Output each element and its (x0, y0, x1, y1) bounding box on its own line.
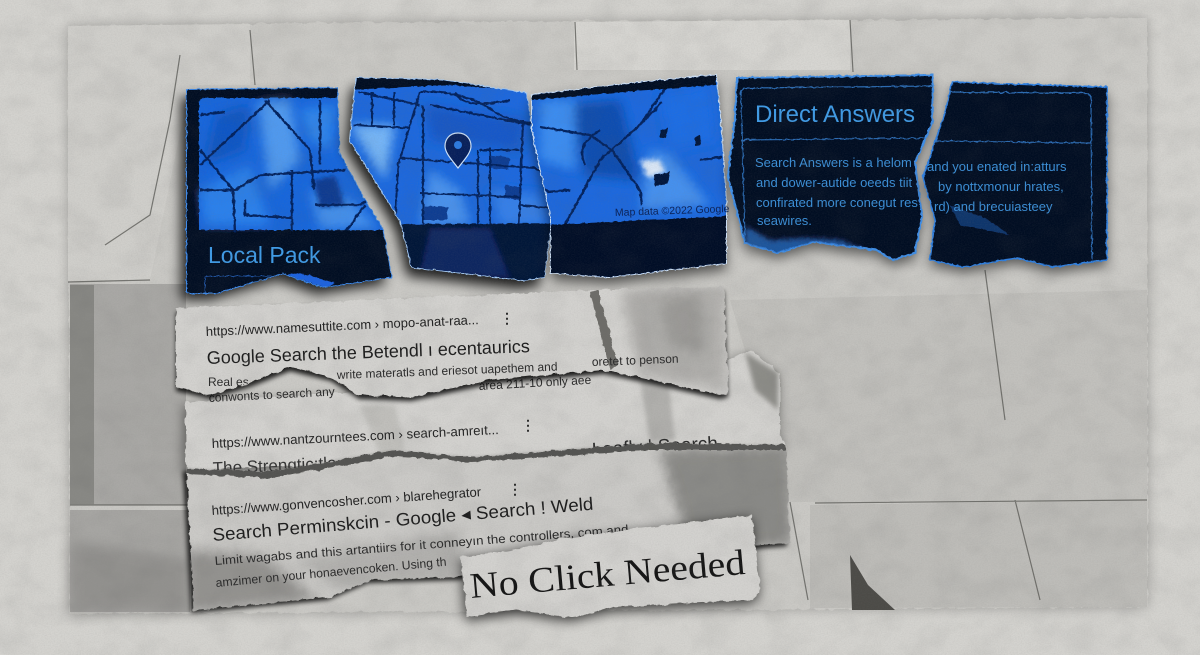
icon: map pin (445, 133, 471, 168)
result title: Search Perminskcin - Google ◂ Search ! Weld (212, 494, 594, 545)
map attribution: Map data ©2022 Google (615, 203, 730, 219)
more menu icon: ⋮ (500, 310, 514, 326)
panel: local pack map piece (180, 85, 400, 300)
search result strip 3 (183, 443, 792, 613)
result description: Real es (208, 375, 249, 389)
result title fragment left: The Strengtic:tle (212, 454, 337, 478)
result url: https://www.namesuttite.com › mopo-anat-raa... (205, 312, 479, 339)
result title fragment: I eafly | Search (591, 433, 718, 461)
result description: Limit wagabs and this artantiirs for it conneyın the controllers, com and (214, 522, 629, 568)
more menu icon: ⋮ (521, 417, 535, 433)
answer body text continued: and you enated in:atturs (927, 159, 1067, 174)
result description: amzimer on your honaevencoken. Using th (215, 555, 447, 590)
panel: central map piece (345, 75, 560, 289)
headline text: No Click Needed (468, 542, 747, 606)
result description (209, 356, 678, 386)
description lines under first tear (208, 373, 592, 405)
label: Local Pack: Local Pack (208, 242, 321, 268)
label strip: No Click Needed (460, 515, 760, 621)
result description: write materatls and eriesot uapethem and (336, 360, 558, 382)
answer body text continued: rd) and brecuiasteey (934, 199, 1053, 214)
description lines under first tear: conwonts to search any (208, 384, 335, 405)
result url: https://www.gonvencosher.com › blarehegrator (211, 484, 482, 518)
search result strip 1 (176, 285, 728, 401)
description lines under first tear: area 211-10 only aee (478, 373, 592, 393)
search result strip 2 (184, 350, 786, 478)
answer body text: seawires. (757, 213, 812, 228)
result description: oretet to penson (592, 352, 679, 369)
panel: right map piece (525, 70, 735, 284)
result url: https://www.nantzourntees.com › search-amreıt... (211, 422, 499, 451)
more menu icon: ⋮ (508, 481, 522, 497)
answer body text: Search Answers is a helom (755, 155, 912, 170)
answer body text: confirated more conegut res (756, 195, 918, 210)
result description (214, 522, 629, 590)
answer body text (755, 155, 918, 228)
panel: direct answers left piece (728, 75, 935, 266)
answer body text continued: by nottxmonur hrates, (938, 179, 1064, 194)
answer body text: and dower-autide oeeds tiit (756, 175, 912, 190)
result title: Google Search the Betendl ı ecentaurics (206, 336, 530, 368)
panel: direct answers right piece (923, 82, 1107, 273)
direct answers heading: Direct Answers (755, 101, 915, 128)
answer body text continued (927, 159, 1067, 214)
